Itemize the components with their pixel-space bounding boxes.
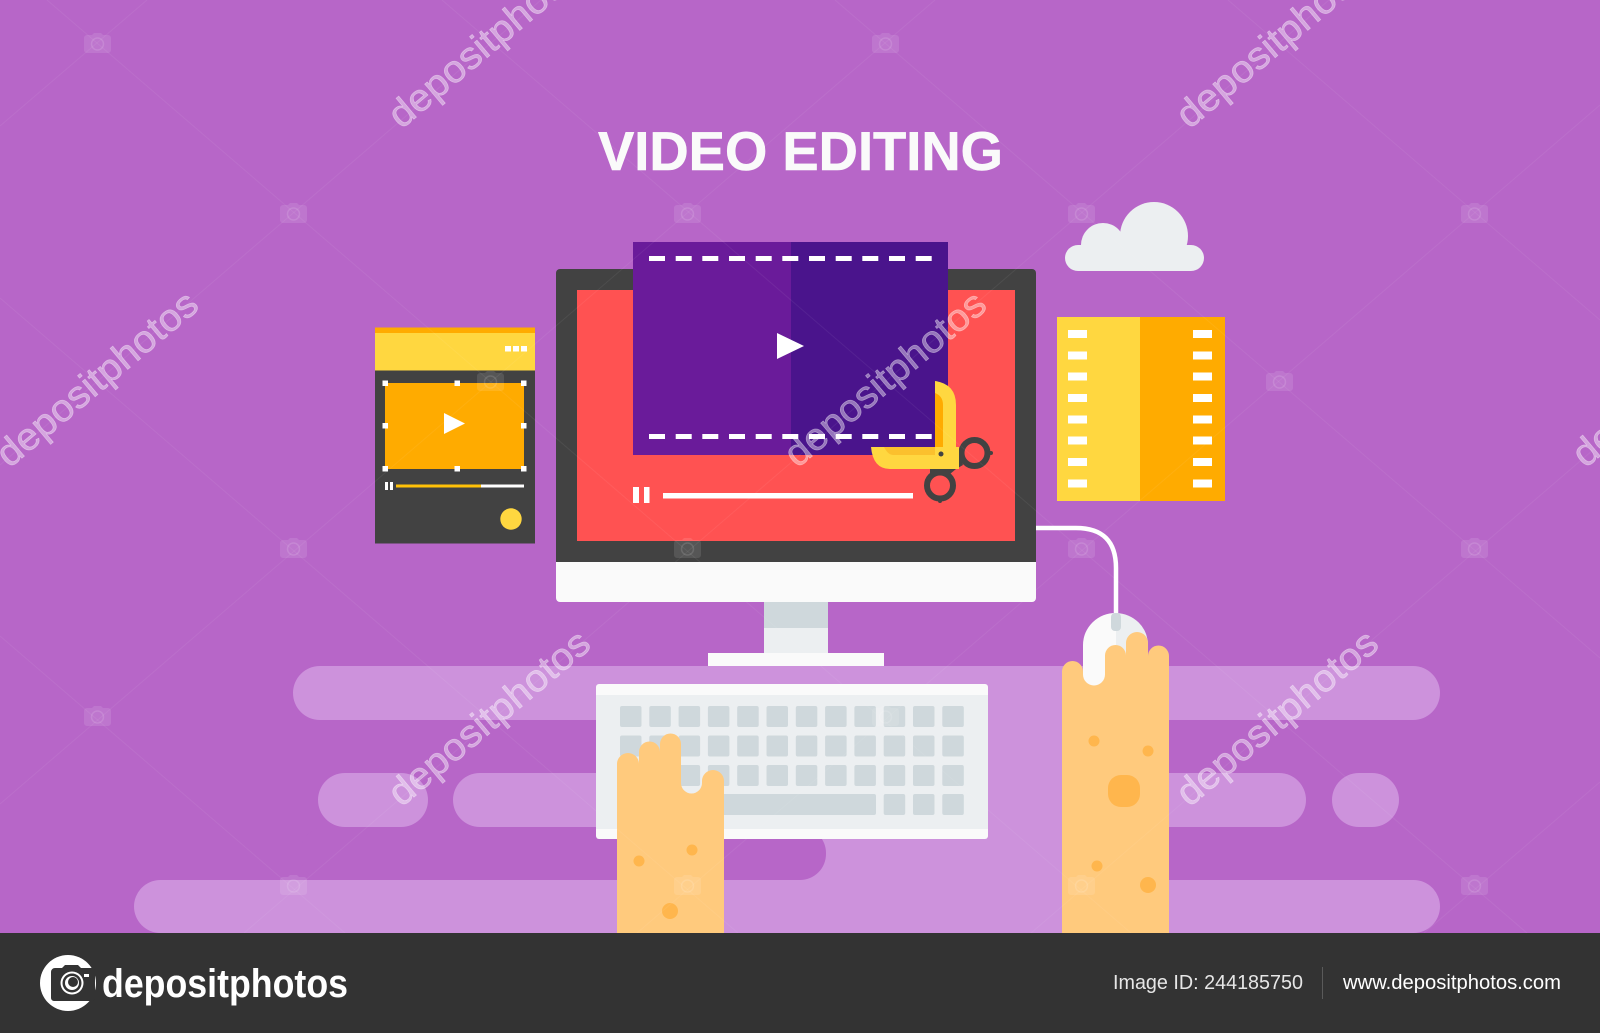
monitor: [556, 269, 1036, 666]
right hand: [1062, 632, 1169, 933]
icon: footer camera logo: [40, 955, 96, 1011]
watermark text: depositphotos: [380, 622, 599, 815]
watermark text: [0, 0, 1600, 815]
watermark cameras: [84, 33, 1488, 895]
watermark text: depositphotos: [1168, 622, 1387, 815]
mouse cable: [1036, 528, 1116, 620]
cloud icon: [1065, 202, 1204, 271]
menu dots: [505, 346, 527, 352]
record button: [500, 508, 522, 530]
image id: Image ID: 244185750: [1113, 971, 1303, 994]
purple video clip: [633, 242, 948, 455]
film strip: [1057, 317, 1225, 501]
footer bar: [0, 933, 1600, 1033]
background pills: [134, 666, 1440, 933]
video frame with selection handles: [382, 380, 526, 472]
title: VIDEO EDITING: [598, 120, 1003, 182]
icon: scissors: [871, 381, 993, 503]
website url: www.depositphotos.com: [1342, 971, 1561, 994]
left hand: [617, 734, 724, 933]
monitor stand: [708, 600, 884, 666]
small progress bar: [385, 482, 524, 490]
left video player panel: [375, 328, 535, 544]
keyboard: [596, 684, 988, 839]
computer mouse: [1083, 613, 1148, 700]
main progress bar: [633, 487, 913, 503]
watermark text: depositphotos: [776, 283, 995, 476]
footer logo wordmark: depositphotos: [102, 962, 348, 1006]
